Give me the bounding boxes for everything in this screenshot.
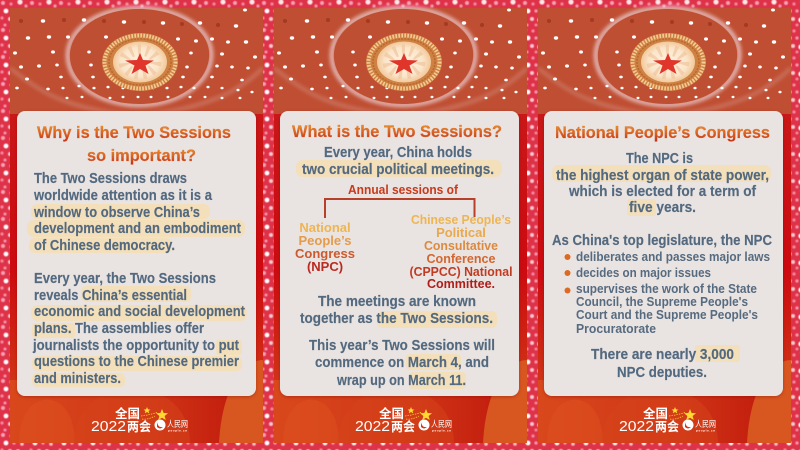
bullet list: Procuratorate [576,322,656,336]
text block: plans: Every year, the Two Sessions [34,271,216,287]
text block: deputies [591,347,734,381]
text block: intro: Every year, China holds [324,145,472,161]
title: Why is the Two Sessions [37,123,231,142]
panel background: ceiling and red frame [10,8,263,443]
text block: NPC definition: which is elected for a term of [568,184,756,200]
highlights [296,160,502,389]
CPPCC label: Political [436,225,486,240]
heading: annual sessions: Annual sessions of [348,182,459,197]
bracket [325,199,474,218]
text block: dates: wrap up on March 11. [336,373,466,389]
text block: plans: and ministers. [34,371,121,387]
bullet list: Court and the Supreme People's [576,308,758,322]
text block: dates: This year’s Two Sessions will [309,338,495,354]
text block: intro: two crucial political meetings. [302,162,494,178]
CPPCC label: Consultative [424,238,498,253]
text block: known as [300,294,493,327]
NPC label: People’s [299,233,351,248]
text block: intro [302,145,494,178]
CPPCC label: Conference [426,251,496,266]
NPC label [295,220,355,274]
logo [619,406,716,435]
diagram: annual sessions [295,182,512,291]
bullet list: Council, the Supreme People's [576,295,748,309]
NPC label: (NPC) [307,259,343,274]
CPPCC label: (CPPCC) National [410,264,512,279]
card [280,111,519,396]
card [17,111,256,396]
panel background: ceiling and red frame [538,8,791,443]
text block: attention: of Chinese democracy. [34,238,175,254]
text block: attention: worldwide attention as it is a [33,188,213,204]
CPPCC label [410,212,512,291]
text block: plans [32,271,245,387]
title: What is the Two Sessions? [292,122,502,141]
bullet list: decides on major issues [576,266,711,280]
logo [355,406,452,435]
CPPCC label: Committee. [427,276,495,291]
logo [91,406,188,435]
panel: what is [274,8,527,443]
text block: dates: commence on March 4, and [315,355,489,371]
highlights [552,165,771,362]
bullet list: supervises the work of the State [576,282,757,296]
text block: plans: journalists the opportunity to put [32,338,239,354]
text block: plans: reveals China’s essential [34,288,187,304]
title: National People’s Congress [555,123,770,142]
text block: NPC definition: five years. [629,200,696,216]
panel: why important [10,8,263,443]
CPPCC label: Chinese People’s [411,212,511,227]
text block: plans: plans. The assemblies offer [34,321,204,337]
text block: attention: window to observe China’s [33,205,200,221]
text block: deputies: There are nearly 3,000 [591,347,734,363]
text block: dates [309,338,495,389]
text block: known as: together as the Two Sessions. [300,311,493,327]
text block: attention [33,171,241,254]
bullet list: deliberates and passes major laws [576,250,770,264]
text block: plans: questions to the Chinese premier [34,354,239,370]
text block: attention: development and an embodiment [34,221,241,237]
panel background: ceiling and red frame [274,8,527,443]
text block: plans: economic and social development [34,304,245,320]
text block: deputies: NPC deputies. [617,365,707,381]
highlights [27,204,247,387]
text block: known as: The meetings are known [318,294,476,310]
bullet list [564,250,770,336]
text block: NPC definition: the highest organ of state power, [556,168,769,184]
title [37,123,231,165]
card [544,111,783,396]
panel: NPC [538,8,791,443]
NPC label: National [299,220,351,235]
text block: NPC definition [556,151,769,216]
text block: attention: The Two Sessions draws [34,171,187,187]
title: so important? [87,146,196,165]
NPC label: Congress [295,246,355,261]
text block: legislature: As China's top legislature, the NPC [552,233,772,249]
text block: NPC definition: The NPC is [626,151,693,167]
